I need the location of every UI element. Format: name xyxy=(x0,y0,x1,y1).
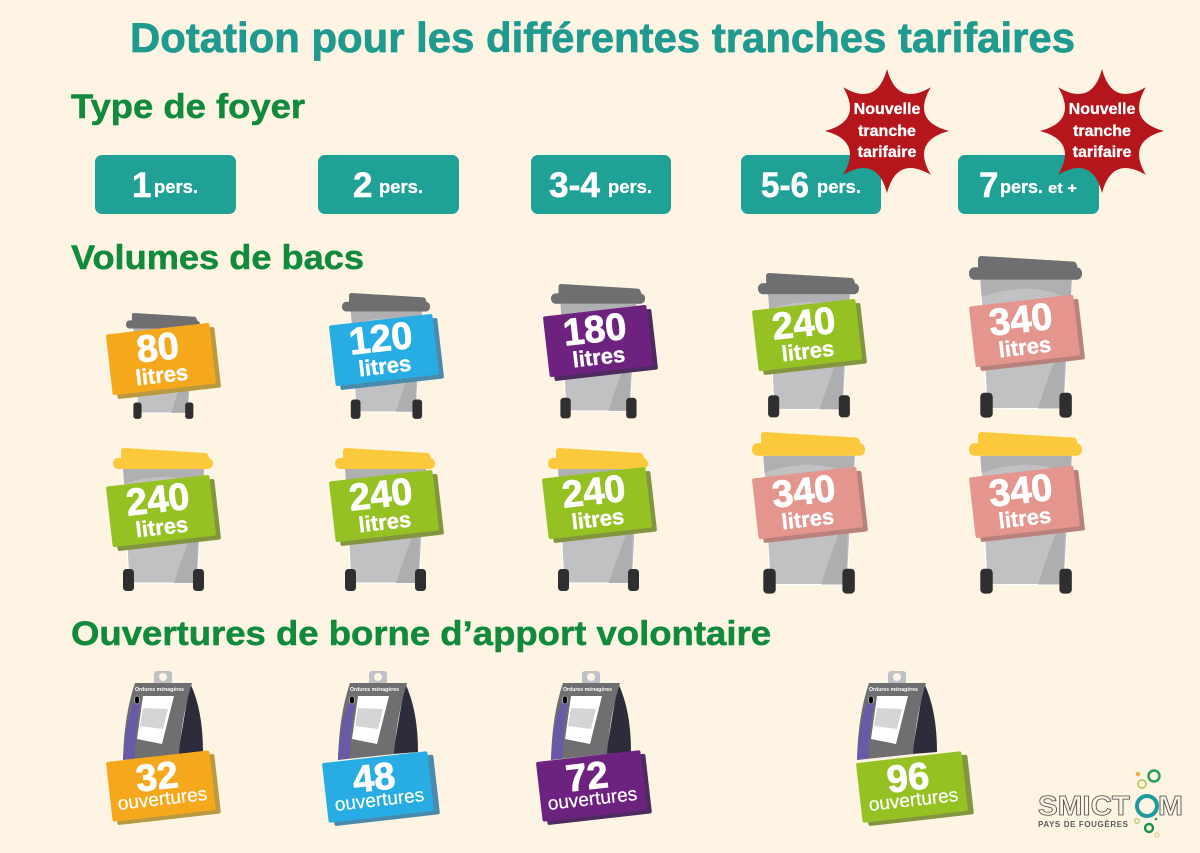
drop-off terminal: 96 ouvertures: ouvertures xyxy=(868,785,959,816)
household button: 7 pers. et +: pers. xyxy=(1000,177,1043,197)
badge: nouvelle tranche 7: Nouvelle xyxy=(1069,101,1135,118)
household button: 2 pers.: 2 xyxy=(353,166,372,205)
drop-off terminal: 72 ouvertures xyxy=(536,671,652,826)
title: Dotation pour les différentes tranches tarifaires xyxy=(130,14,1075,61)
bin: 120 litres: 120 xyxy=(347,315,415,364)
household button: 3-4 pers. xyxy=(531,155,671,214)
bin: 240 litres, yellow lid, column 3 xyxy=(542,448,657,591)
bin: 340 litres, grey lid: 340 xyxy=(987,296,1055,345)
household button: 2 pers.: pers. xyxy=(379,177,423,197)
drop-off terminal: 96 ouvertures: Ordures ménagères xyxy=(869,687,918,693)
drop-off terminal: 32 ouvertures: Ordures ménagères xyxy=(135,687,184,693)
household button: 2 pers. xyxy=(318,155,459,214)
bin: 240 litres, yellow lid, column 1: 240 xyxy=(124,476,192,525)
household button: 3-4 pers.: pers. xyxy=(608,177,652,197)
bin: 340 litres, yellow lid, column 5 xyxy=(969,432,1085,594)
drop-off terminal: 96 ouvertures: 96 xyxy=(885,755,931,802)
bin: 240 litres, grey lid: litres xyxy=(780,336,835,366)
logo: SMICTOM xyxy=(1038,770,1183,837)
bin: 240 litres, yellow lid, column 3: litres xyxy=(570,504,625,534)
bin: 240 litres, yellow lid, column 2: litres xyxy=(357,507,412,537)
drop-off terminal: 48 ouvertures xyxy=(322,671,440,827)
badge: nouvelle tranche 5-6: Nouvelle xyxy=(854,101,920,118)
drop-off terminal: 72 ouvertures: 72 xyxy=(564,754,610,801)
household button: 5-6 pers.: pers. xyxy=(817,177,861,197)
household button: 7 pers. et +: 7 xyxy=(979,166,998,205)
bin: 80 litres: 80 xyxy=(134,325,181,372)
badge: nouvelle tranche 7: tranche xyxy=(1073,123,1131,140)
badge: nouvelle tranche 7: tarifaire xyxy=(1073,144,1131,161)
bin: 340 litres, grey lid xyxy=(969,256,1085,418)
heading: ouvertures de borne: Ouvertures de borne d’apport volontaire xyxy=(71,615,771,653)
bin: 340 litres, yellow lid, column 4: litres xyxy=(780,504,835,534)
bin: 120 litres xyxy=(329,293,444,419)
logo: SMICTOM: PAYS DE FOUGÈRES xyxy=(1038,820,1129,829)
heading: type de foyer: Type de foyer xyxy=(71,88,305,126)
drop-off terminal: 72 ouvertures: Ordures ménagères xyxy=(563,687,612,693)
heading: volumes de bacs: Volumes de bacs xyxy=(71,239,364,277)
badge: nouvelle tranche 5-6: tarifaire xyxy=(858,144,916,161)
bin: 180 litres xyxy=(543,284,658,418)
bin: 240 litres, yellow lid, column 1: litres xyxy=(134,512,189,542)
bin: 180 litres: 180 xyxy=(561,306,629,355)
drop-off terminal: 32 ouvertures: 32 xyxy=(134,754,180,801)
household button: 5-6 pers.: 5-6 xyxy=(761,166,809,205)
badge: nouvelle tranche 5-6 xyxy=(825,69,949,193)
bin: 240 litres, yellow lid, column 2: 240 xyxy=(347,471,415,520)
bin: 340 litres, grey lid: litres xyxy=(997,332,1052,362)
drop-off terminal: 48 ouvertures: Ordures ménagères xyxy=(350,687,399,693)
logo: SMICTOM: SMICT xyxy=(1038,790,1130,821)
household button: 7 pers. et + xyxy=(958,155,1099,214)
bin: 240 litres, grey lid: 240 xyxy=(770,300,838,349)
bin: 240 litres, yellow lid, column 3: 240 xyxy=(560,468,628,517)
drop-off terminal: 32 ouvertures: ouvertures xyxy=(117,784,208,815)
drop-off terminal: 48 ouvertures: ouvertures xyxy=(334,785,425,816)
drop-off terminal: 72 ouvertures: ouvertures xyxy=(547,784,638,815)
bin: 340 litres, yellow lid, column 5: litres xyxy=(997,503,1052,533)
bin: 80 litres xyxy=(106,313,221,419)
household button: 5-6 pers. xyxy=(741,155,881,214)
bin: 340 litres, yellow lid, column 4: 340 xyxy=(770,468,838,517)
household button: 3-4 pers.: 3-4 xyxy=(549,166,601,205)
drop-off terminal: 96 ouvertures xyxy=(856,671,974,827)
bin: 80 litres: litres xyxy=(134,360,189,390)
drop-off terminal: 48 ouvertures: 48 xyxy=(351,755,397,802)
logo: SMICTOM: M xyxy=(1158,790,1183,821)
bin: 240 litres, yellow lid, column 2 xyxy=(329,448,444,591)
badge: nouvelle tranche 5-6: tranche xyxy=(858,123,916,140)
bin: 340 litres, yellow lid, column 4 xyxy=(752,432,868,594)
household button: 1 pers. xyxy=(95,155,236,214)
badge: nouvelle tranche 7 xyxy=(1040,69,1164,193)
bin: 120 litres: litres xyxy=(357,351,412,381)
bin: 340 litres, yellow lid, column 5: 340 xyxy=(987,467,1055,516)
drop-off terminal: 32 ouvertures xyxy=(106,671,221,826)
bin: 240 litres, yellow lid, column 1 xyxy=(106,448,221,591)
household button: 7 pers. et +: et + xyxy=(1048,180,1077,197)
bin: 180 litres: litres xyxy=(571,342,626,372)
bin: 240 litres, grey lid xyxy=(752,273,867,417)
household button: 1 pers.: 1 xyxy=(132,166,151,205)
household button: 1 pers.: pers. xyxy=(154,177,198,197)
